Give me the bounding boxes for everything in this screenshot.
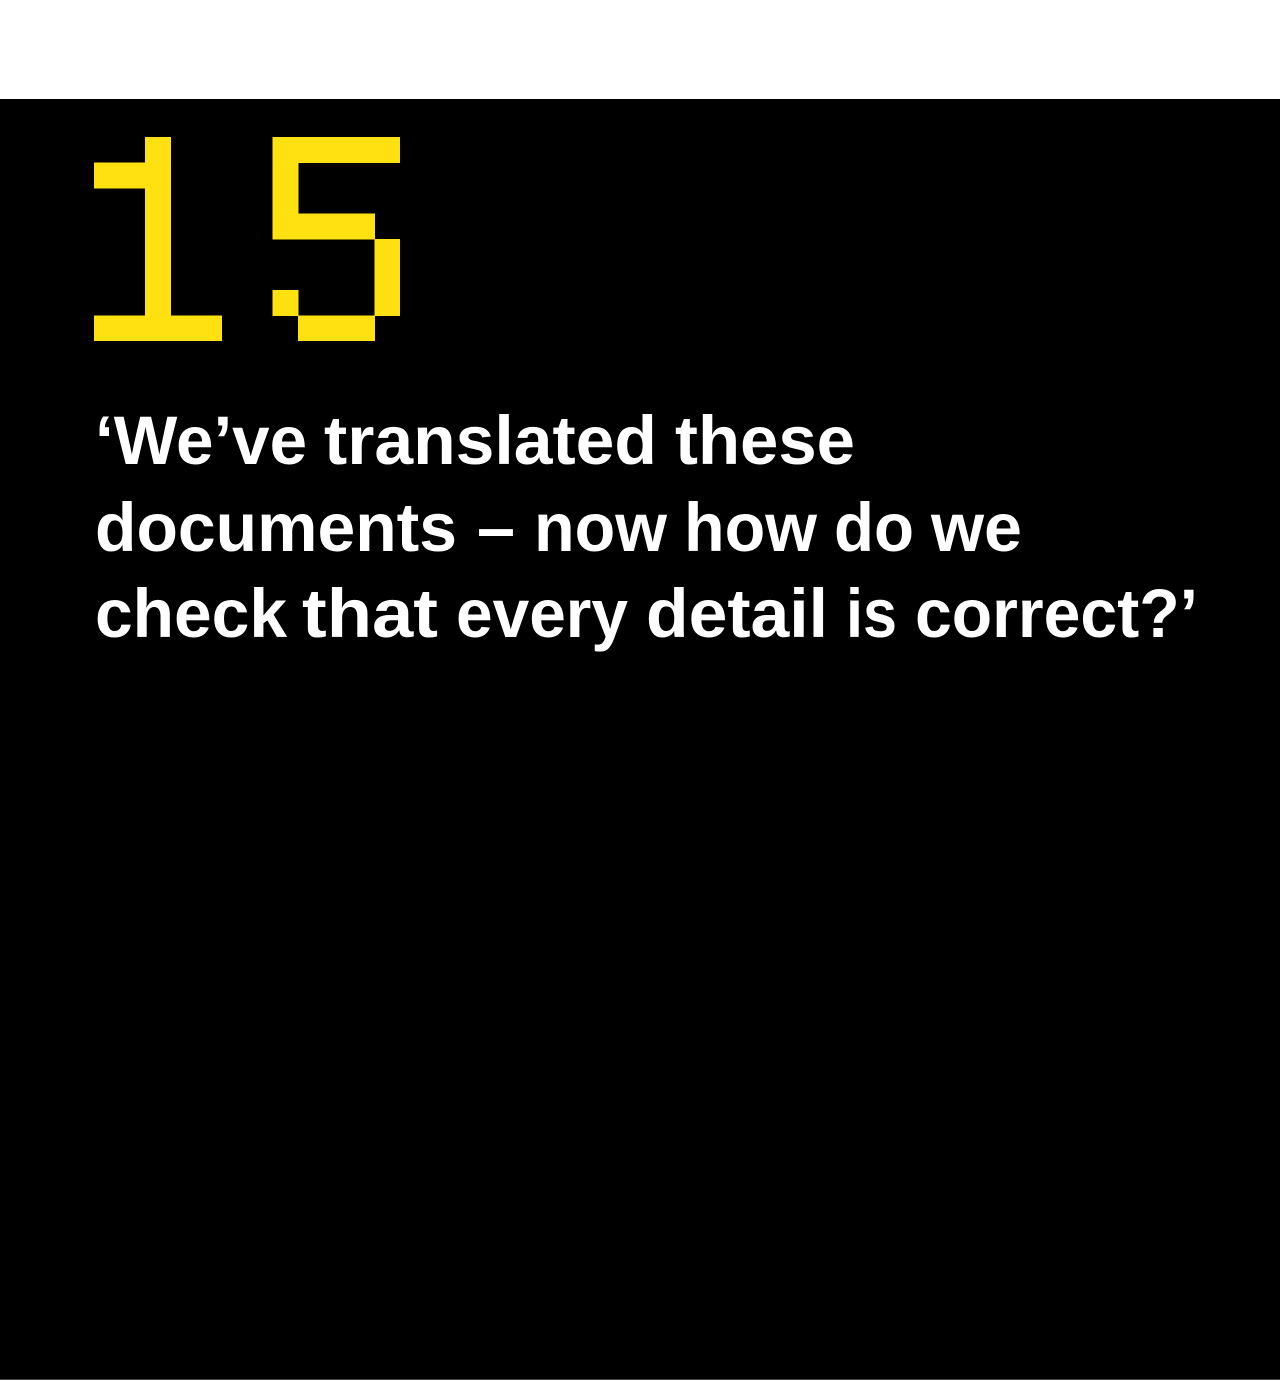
- heading: quote: –: [477, 489, 515, 566]
- heading: quote: translated: [324, 402, 657, 479]
- heading: quote: every: [456, 575, 628, 652]
- heading: quote: documents: [95, 489, 457, 566]
- heading: quote: that: [302, 575, 438, 652]
- heading: quote: how: [684, 489, 817, 566]
- heading: quote: correct?’: [915, 575, 1198, 652]
- heading: quote: [95, 402, 1198, 652]
- number: 15: 15: [73, 85, 415, 435]
- heading: quote: check: [95, 575, 288, 652]
- heading: quote: ‘We’ve: [95, 402, 307, 479]
- heading: quote: now: [534, 489, 667, 566]
- heading: quote: these: [675, 402, 855, 479]
- heading: quote: detail: [646, 575, 828, 652]
- heading: quote: do: [834, 489, 914, 566]
- heading: quote: is: [846, 575, 897, 652]
- heading: quote: we: [930, 489, 1022, 566]
